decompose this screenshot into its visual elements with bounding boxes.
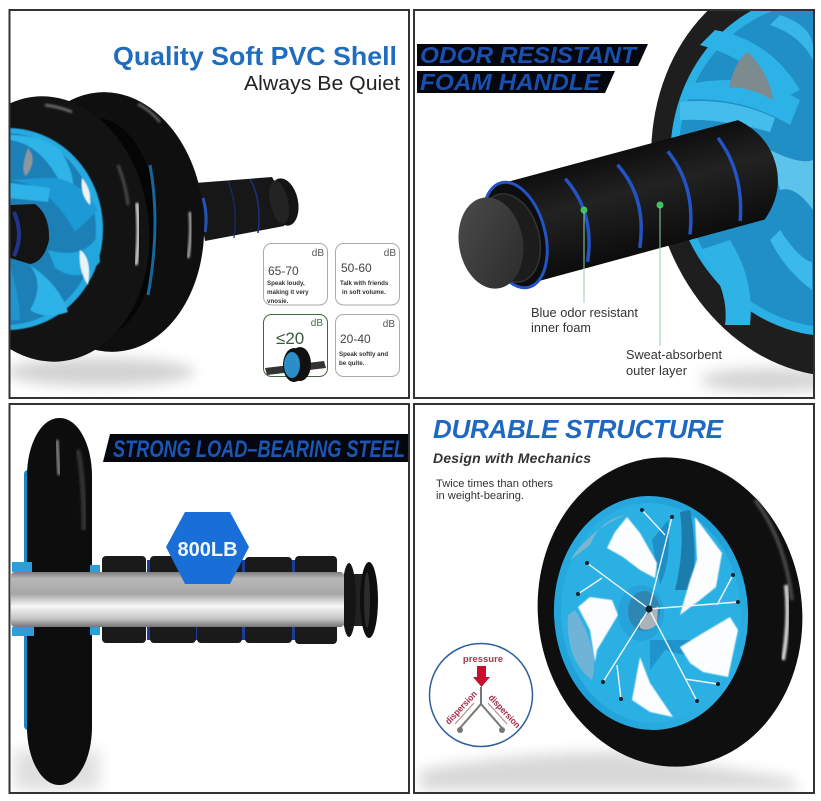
front wheel tyre	[10, 96, 150, 362]
foam handle	[509, 120, 778, 281]
handle collar	[490, 193, 542, 283]
floor shadow	[14, 750, 99, 790]
floor shadow	[420, 752, 800, 790]
end cap	[458, 197, 524, 289]
centre hub	[618, 585, 664, 641]
card: 50-60 dB: dB	[384, 248, 396, 259]
card: 65-70 dB: vnosie.	[267, 298, 289, 305]
card: 65-70 dB: making it very	[267, 289, 309, 296]
panel: strong load-bearing steel	[10, 404, 409, 793]
callout: inner foam	[531, 206, 639, 335]
card: 50-60 dB: Talk with friends	[340, 280, 389, 287]
card: 20 dB or less with roller: dB	[311, 318, 323, 329]
callout: outer layer	[626, 202, 723, 378]
blue end ring	[485, 180, 549, 290]
foam sleeve	[509, 120, 778, 281]
icon: mini roller	[265, 347, 326, 382]
panel: durable structure	[414, 404, 820, 793]
subheading: design with mechanics: Design with Mechanics	[433, 450, 591, 466]
panel: quality soft PVC shell	[0, 10, 409, 398]
blue rim	[548, 491, 754, 735]
diagram: pressure dispersion	[430, 644, 532, 746]
card: 20-40 dB: 20-40	[340, 332, 371, 346]
tyre	[538, 457, 802, 767]
floor shadow	[700, 368, 821, 392]
diagram: pressure dispersion: pressure	[463, 654, 503, 665]
card: 50-60 dB: 50-60	[341, 261, 372, 275]
text block: weight-bearing note: Twice times than others	[436, 478, 553, 490]
text block: weight-bearing note: in weight-bearing.	[436, 490, 524, 502]
large wheel behind handle	[652, 11, 813, 374]
callout: outer layer: outer layer	[626, 364, 687, 378]
foam handle behind wheels	[195, 177, 284, 241]
arrow: pressure	[473, 666, 490, 687]
card: 20-40 dB: be quite.	[339, 360, 365, 367]
diagram: pressure dispersion: dispersion	[487, 693, 522, 730]
frame	[414, 10, 814, 398]
wheel wall shading	[568, 510, 694, 680]
card: 50-60 dB	[336, 244, 400, 305]
heading banner line 1: ODOR RESISTANT	[420, 42, 638, 68]
foam grips	[102, 556, 337, 644]
wheel	[538, 457, 802, 767]
load branches	[460, 687, 502, 728]
badge: 800LB	[166, 512, 249, 584]
load dispersion lines	[578, 510, 738, 701]
heading: quality soft PVC shell: Quality Soft PVC Shell	[113, 41, 397, 71]
handle end cap	[270, 178, 299, 226]
callout: outer layer: Sweat-absorbent	[626, 348, 723, 362]
heading: durable structure: DURABLE STRUCTURE	[433, 414, 724, 444]
front hub axle	[10, 204, 49, 264]
blue inner foam rings	[565, 136, 748, 262]
front wheel blue hub	[0, 128, 103, 330]
white window openings	[578, 517, 738, 717]
callout: inner foam: Blue odor resistant	[531, 306, 639, 320]
heading banner line 2: FOAM HANDLE	[420, 69, 601, 95]
callout: inner foam: inner foam	[531, 321, 591, 335]
heading banner: STRONG LOAD–BEARING STEEL	[113, 436, 405, 463]
card: 20 dB or less with roller	[264, 314, 328, 382]
card: 20-40 dB: Speak softly and	[339, 351, 388, 358]
text block: weight-bearing note	[436, 478, 553, 502]
panel: odor resistant foam handle	[414, 0, 821, 411]
diagram: pressure dispersion: dispersion	[443, 689, 479, 726]
card: 20-40 dB: dB	[383, 319, 395, 330]
frame	[10, 10, 409, 398]
wheel side view	[12, 418, 100, 785]
end cap	[340, 562, 378, 638]
card: 50-60 dB: in soft volume.	[342, 289, 386, 296]
card: 65-70 dB: Speak loudy,	[267, 280, 305, 287]
card: 65-70 dB: 65-70	[268, 264, 299, 278]
badge: 800LB: 800LB	[177, 539, 238, 561]
card: 65-70 dB: dB	[312, 248, 324, 259]
floor shadow	[5, 358, 195, 386]
frame	[414, 404, 814, 793]
steel bar	[11, 572, 344, 627]
card: 65-70 dB	[264, 244, 328, 305]
load points	[576, 508, 740, 703]
card: 20 dB or less with roller: ≤20	[276, 329, 304, 348]
card: 20-40 dB	[336, 314, 400, 376]
rear wheel	[69, 92, 204, 352]
frame	[10, 404, 409, 793]
subheading: always be quiet: Always Be Quiet	[244, 72, 400, 95]
